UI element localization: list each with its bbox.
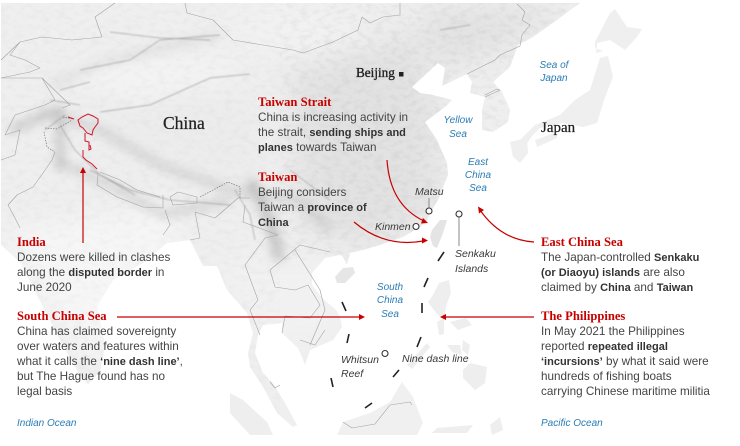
annotation: South China Sea: legal basis — [17, 385, 72, 398]
marker: Whitsun Reef — [341, 350, 388, 380]
ocean: Pacific Ocean: Pacific Ocean — [541, 418, 603, 429]
annotation: Taiwan: China — [258, 217, 289, 229]
land: Philippines — [407, 280, 503, 435]
annotation: India: June 2020 — [17, 281, 72, 294]
annotation: South China Sea: South China Sea — [17, 309, 107, 323]
location markers — [341, 186, 496, 380]
annotation: Taiwan Strait: the strait, sending ships and — [258, 126, 406, 139]
land: Borneo — [337, 382, 423, 435]
annotation: Taiwan: Beijing considers — [258, 186, 346, 199]
annotation: The Philippines: In May 2021 the Philippines — [541, 325, 685, 338]
annotation: South China Sea: but The Hague found has no — [17, 370, 165, 383]
marker: Senkaku Islands — [455, 211, 496, 275]
label: China: China — [163, 113, 205, 133]
annotation: Taiwan Strait — [258, 95, 408, 154]
annotation: India: India — [17, 235, 46, 249]
land: Taiwan — [430, 220, 447, 248]
annotation: East China Sea: (or Diaoyu) islands — [541, 267, 640, 279]
sea: South China Sea: China — [377, 295, 403, 306]
marker: Whitsun Reef: Reef — [341, 368, 364, 380]
arrow: Taiwan — [354, 222, 428, 244]
annotation: The Philippines: ‘incursions’ by what it said were — [541, 355, 709, 368]
land: Japan — [510, 9, 642, 163]
marker: Matsu — [415, 186, 444, 214]
annotation: East China Sea — [541, 235, 699, 294]
marker: Whitsun Reef: Whitsun — [341, 354, 379, 366]
sea: East China Sea: East — [468, 157, 488, 168]
sea: Sea of Japan: Japan — [539, 73, 568, 84]
marker: Senkaku Islands: Islands — [455, 263, 489, 275]
land: Sumatra — [230, 393, 273, 435]
disputed India-China border in red — [68, 114, 98, 169]
label: Japan: Japan — [541, 120, 576, 136]
annotation: East China Sea: The Japan-controlled Senkaku — [541, 251, 699, 264]
country borders — [1, 3, 530, 428]
marker: Matsu: Matsu — [415, 186, 444, 198]
sea: Sea of Japan: Sea of — [540, 60, 568, 71]
annotation: East China Sea: are also — [640, 266, 685, 279]
annotation: The Philippines: reported repeated illegal — [541, 340, 668, 353]
mountain relief — [10, 35, 330, 260]
annotation: South China Sea: China has claimed sovereignty — [17, 325, 176, 338]
ocean: Indian Ocean: Indian Ocean — [17, 418, 77, 429]
annotation: India: Dozens were killed in clashes — [17, 251, 170, 264]
regional land shading — [296, 12, 530, 237]
arrow: East China Sea — [478, 206, 534, 242]
relief creases — [45, 25, 470, 240]
annotation: The Philippines: The Philippines — [541, 309, 625, 323]
annotation: Taiwan — [258, 170, 367, 229]
nine dash line — [331, 252, 444, 408]
sea: East China Sea: Sea — [469, 183, 487, 194]
annotation: The Philippines: hundreds of fishing boats — [541, 370, 672, 383]
marker: Senkaku Islands: Senkaku — [455, 248, 496, 260]
land: Hainan — [335, 267, 355, 283]
annotation: Taiwan: Taiwan — [258, 170, 297, 184]
marker: Kinmen: Kinmen — [375, 221, 411, 233]
sea: South China Sea: Sea — [381, 309, 399, 320]
annotation: Taiwan: Taiwan a province of — [258, 201, 367, 214]
sea: South China Sea: South — [377, 282, 403, 293]
arrow: South China Sea — [117, 314, 365, 320]
arrows — [80, 160, 534, 320]
annotation: India — [17, 235, 170, 294]
sea labels — [17, 60, 603, 429]
label: Nine dash line: Nine dash line — [402, 353, 469, 365]
annotation: The Philippines: carrying Chinese maritime militia — [541, 385, 710, 398]
sea: East China Sea: China — [465, 170, 491, 181]
fine texture — [0, 0, 280, 446]
sea: Yellow Sea: Yellow — [444, 115, 472, 126]
land: mainland Asia — [1, 3, 580, 427]
arrow: India — [80, 167, 86, 243]
annotation: East China Sea: East China Sea — [541, 235, 624, 249]
annotation: South China Sea: over waters and features within — [17, 340, 179, 353]
label: Beijing with marker: Beijing — [356, 65, 395, 80]
arrow: The Philippines — [440, 314, 534, 320]
arrow: Taiwan Strait — [387, 160, 428, 224]
annotation: Taiwan Strait: planes towards Taiwan — [258, 141, 376, 154]
annotation: India: along the disputed border in — [17, 266, 164, 279]
place labels — [163, 65, 576, 136]
annotation: East China Sea: claimed by China and Taiwan — [541, 281, 693, 294]
annotation: South China Sea — [16, 309, 183, 398]
sea: Yellow Sea: Sea — [449, 129, 467, 140]
annotation: The Philippines — [541, 309, 710, 398]
dotted disputed borders — [44, 117, 240, 198]
annotation: South China Sea: what it calls the ‘nine dash line’, — [17, 355, 183, 368]
annotation: Taiwan Strait: Taiwan Strait — [258, 95, 332, 109]
annotation: Taiwan Strait: China is increasing activity in — [258, 111, 408, 124]
